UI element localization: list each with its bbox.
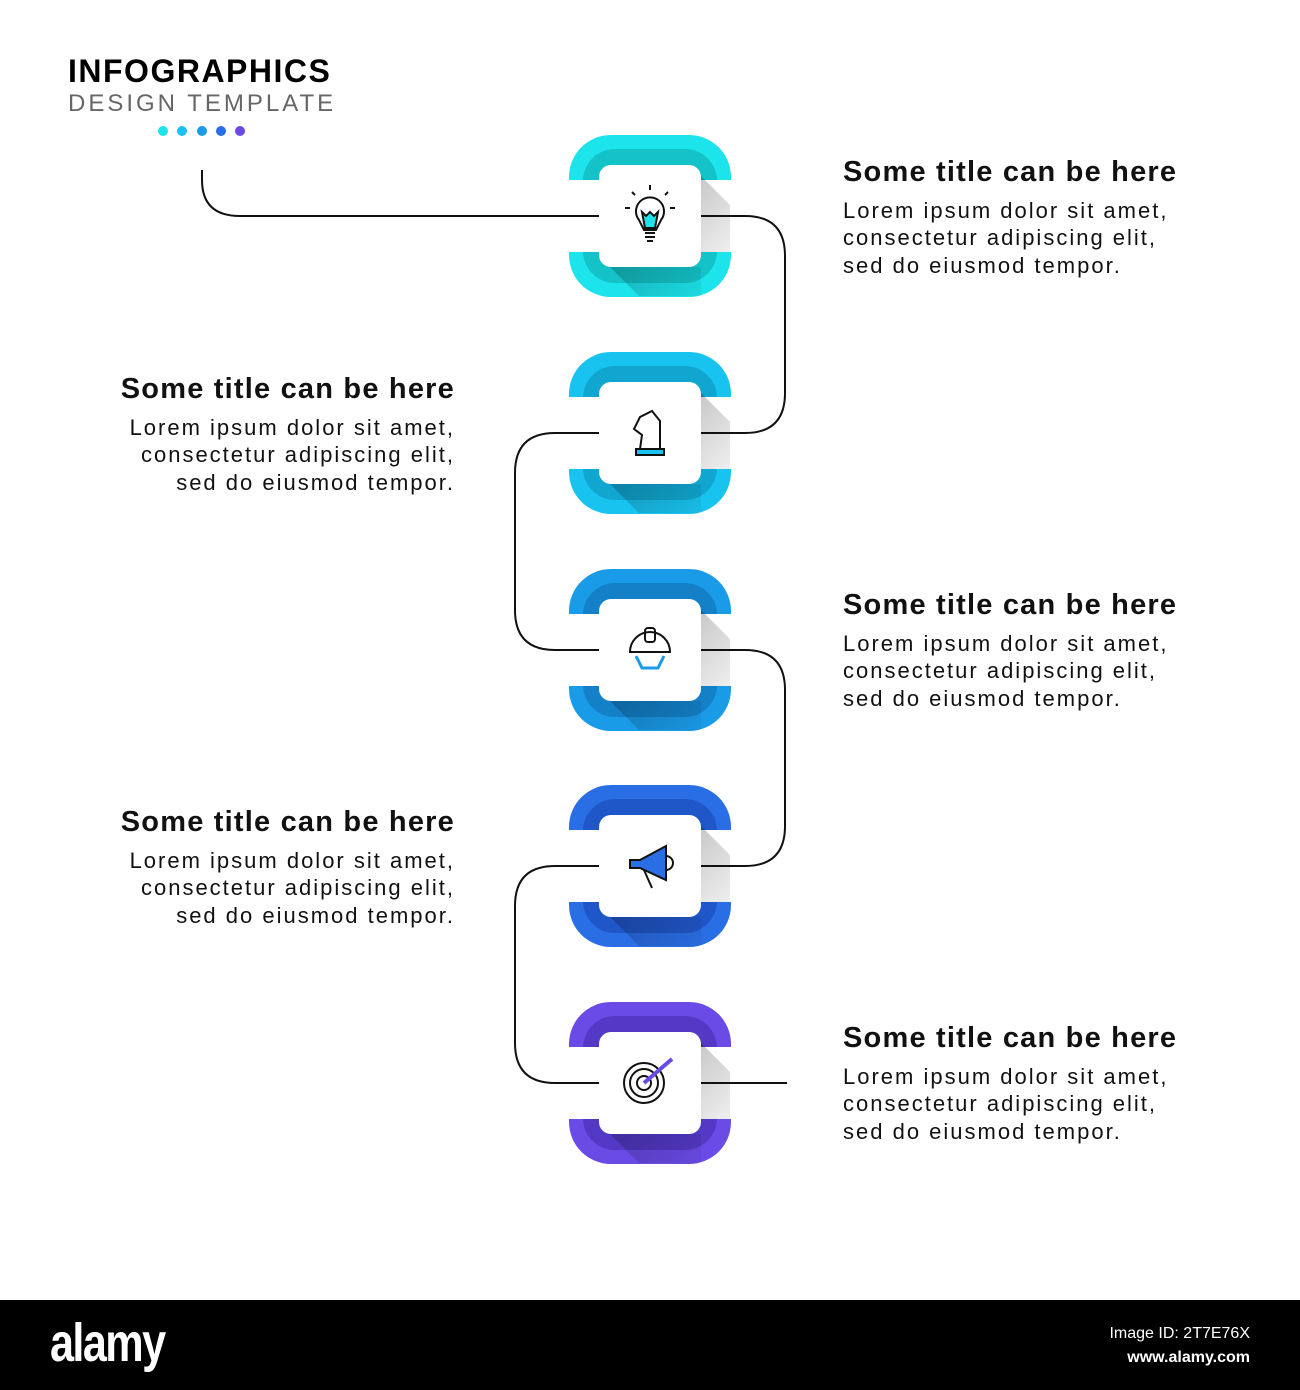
connector line — [202, 170, 787, 1083]
text: step 1: Some title can be here — [843, 156, 1177, 188]
step 4 — [568, 785, 732, 947]
text: step 3: Lorem ipsum dolor sit amet, — [843, 631, 1168, 656]
text: step 5: Some title can be here — [843, 1022, 1177, 1054]
text: step 3: Some title can be here — [843, 589, 1177, 621]
text: step 5: Lorem ipsum dolor sit amet, — [843, 1064, 1168, 1089]
text: step 3: consectetur adipiscing elit, — [843, 658, 1157, 683]
text: step 5: sed do eiusmod tempor. — [843, 1119, 1122, 1144]
header — [68, 53, 336, 136]
image id — [1109, 1325, 1250, 1366]
text: step 2: sed do eiusmod tempor. — [176, 470, 455, 495]
text: step 1 — [843, 156, 1177, 278]
icon: helmet gear — [630, 628, 670, 668]
text: step 4: Some title can be here — [121, 806, 455, 838]
text: step 2: Lorem ipsum dolor sit amet, — [130, 415, 455, 440]
step 2 — [568, 352, 732, 514]
text: step 4: Lorem ipsum dolor sit amet, — [130, 848, 455, 873]
text: step 1: Lorem ipsum dolor sit amet, — [843, 198, 1168, 223]
text: step 5: consectetur adipiscing elit, — [843, 1091, 1157, 1116]
text: step 2: consectetur adipiscing elit, — [141, 442, 455, 467]
text: step 5 — [843, 1022, 1177, 1144]
icon: chess knight — [634, 411, 664, 455]
text: step 3: sed do eiusmod tempor. — [843, 686, 1122, 711]
text: step 3 — [843, 589, 1177, 711]
step 1 — [568, 135, 732, 297]
text: step 4: consectetur adipiscing elit, — [141, 875, 455, 900]
image id: www.alamy.com — [1127, 1349, 1250, 1366]
text: step 1: sed do eiusmod tempor. — [843, 253, 1122, 278]
dots — [158, 126, 245, 136]
step 3 — [568, 569, 732, 731]
subtitle: DESIGN TEMPLATE — [68, 90, 336, 117]
text: step 4 — [121, 806, 455, 928]
logo: alamy — [50, 1313, 164, 1373]
icon: megaphone — [630, 846, 673, 888]
text: step 2 — [121, 373, 455, 495]
icon: target — [624, 1059, 672, 1103]
step 5 — [568, 1002, 732, 1164]
text: step 2: Some title can be here — [121, 373, 455, 405]
text: step 4: sed do eiusmod tempor. — [176, 903, 455, 928]
title: INFOGRAPHICS — [68, 53, 331, 89]
image id: Image ID: 2T7E76X — [1109, 1325, 1250, 1342]
text: step 1: consectetur adipiscing elit, — [843, 225, 1157, 250]
icon: bulb — [625, 185, 675, 241]
footer bar — [0, 1300, 1300, 1390]
